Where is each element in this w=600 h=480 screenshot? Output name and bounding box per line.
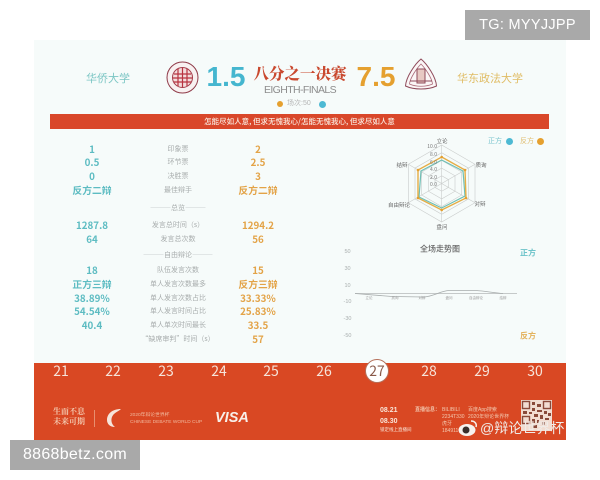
broadcast info: 2234T330 <box>442 414 465 420</box>
footer band <box>34 363 566 440</box>
stats table: vote and speech data: 40.4 <box>82 318 102 332</box>
radar chart: 10.0 <box>427 143 437 150</box>
banner: motto: 怎能尽如人意, 但求无愧我心/怎能无愧我心, 但求尽如人意 <box>204 116 395 127</box>
line chart: momentum: 质询 <box>392 295 399 300</box>
broadcast dates <box>380 407 412 432</box>
watermark: telegram id: TG: MYYJJPP <box>479 17 576 33</box>
label: negative side: 反方 <box>520 330 536 342</box>
stats table: vote and speech data: 18 <box>86 263 98 277</box>
stats table: vote and speech data: 反方二辩 <box>238 183 278 197</box>
stats table: vote and speech data: 1294.2 <box>242 218 274 232</box>
stats table: vote and speech data: 1287.8 <box>76 218 108 232</box>
stats table: vote and speech data: 队伍发言次数 <box>157 265 199 275</box>
stats table: vote and speech data: 57 <box>252 332 264 346</box>
footer logo: slogan: 未来可期 <box>53 416 85 427</box>
stats table: vote and speech data: 单人单次时间最长 <box>150 320 206 330</box>
radar chart: 质询 <box>475 161 487 169</box>
calendar dates <box>53 359 543 383</box>
calendar dates: 25 <box>263 361 279 381</box>
stats table: vote and speech data: 2.5 <box>251 155 265 169</box>
broadcast info: 2020年辩论世界杯 <box>468 414 509 420</box>
icon: orange dot <box>277 101 283 107</box>
stats table: vote and speech data: 反方三辩 <box>238 277 278 291</box>
broadcast info: 百度App搜索 <box>468 407 497 413</box>
left team score: 1.5 <box>207 61 245 92</box>
watermark: site <box>10 440 140 470</box>
right team score: 7.5 <box>357 61 395 92</box>
stats table: vote and speech data: 56 <box>252 232 264 246</box>
stats table: vote and speech data: 38.89% <box>74 290 110 304</box>
calendar dates: 22 <box>105 361 121 381</box>
radar chart: 盘问 <box>436 223 448 231</box>
cup text: 2020年辩论世界杯 <box>130 413 169 418</box>
cup text <box>130 412 202 425</box>
calendar dates: 30 <box>527 361 543 381</box>
stats table: vote and speech data: 印象票 <box>168 144 188 154</box>
stats table: vote and speech data: 33.33% <box>240 290 276 304</box>
stats table: vote and speech data: 15 <box>252 263 264 277</box>
stats table: vote and speech data: 单人发言次数最多 <box>150 279 206 289</box>
stats table: vote and speech data: ———自由辩论——— <box>143 250 213 260</box>
stats table: vote and speech data: 0 <box>89 169 95 183</box>
audience votes legend <box>277 99 326 108</box>
line chart: momentum: 30 <box>344 266 351 272</box>
line chart: momentum: 10 <box>344 283 351 289</box>
heading: left team name: 华侨大学 <box>86 73 130 85</box>
calendar dates: 24 <box>211 361 227 381</box>
legend: negative: 反方 <box>520 138 534 145</box>
calendar dates: 29 <box>474 361 490 381</box>
stats table: vote and speech data: 发言总次数 <box>160 234 196 244</box>
stats table: vote and speech data: “缺席审判”时间（s） <box>141 334 215 344</box>
radar chart: 结辩 <box>396 161 408 169</box>
highlighted date 27 <box>365 359 389 383</box>
QR code <box>521 400 552 431</box>
radar chart: 6.0 <box>430 159 437 166</box>
line chart: momentum: 盘问 <box>446 295 453 300</box>
broadcast dates: 08.21 <box>380 407 398 414</box>
stats table: vote and speech data: 0.5 <box>85 155 99 169</box>
stats table: vote and speech data: 单人发言次数占比 <box>150 292 206 302</box>
watermark: site: 8868betz.com <box>23 446 127 463</box>
stats table: vote and speech data: 3 <box>255 169 261 183</box>
legend: affirmative: 正方 <box>488 138 502 145</box>
line chart: momentum <box>344 249 517 339</box>
stats table: vote and speech data: 最佳辩手 <box>164 185 192 195</box>
stats table: vote and speech data: 决胜票 <box>168 171 188 181</box>
stats table: vote and speech data <box>72 142 278 346</box>
weibo handle: @辩论世界杯 <box>480 420 564 436</box>
radar chart: 对辩 <box>474 200 486 208</box>
footer logo: debate world cup <box>94 409 202 427</box>
radar chart: 4.0 <box>430 166 437 173</box>
icon: blue dot <box>319 101 326 108</box>
stats table: vote and speech data: 发言总时间（s） <box>152 220 204 230</box>
radar chart <box>388 137 487 231</box>
icon: orange dot <box>537 138 544 145</box>
calendar dates: 23 <box>158 361 174 381</box>
stats table: vote and speech data: 单人发言时间占比 <box>150 306 206 316</box>
stats table: vote and speech data: 正方三辩 <box>72 277 112 291</box>
stats table: vote and speech data: 2 <box>255 142 261 156</box>
calendar dates: 28 <box>421 361 437 381</box>
radar legend <box>488 137 544 145</box>
icon: cup swirl <box>107 409 121 427</box>
broadcast info: 直播信息： <box>415 407 440 413</box>
radar chart: 立论 <box>436 137 448 145</box>
icon: blue dot <box>506 138 513 145</box>
broadcast dates: 08.30 <box>380 418 398 425</box>
calendar dates: 26 <box>316 361 332 381</box>
banner: motto <box>50 114 549 129</box>
broadcast dates: 锁定线上直播间 <box>380 427 412 432</box>
stats table: vote and speech data: 64 <box>86 232 98 246</box>
line chart: momentum: -50 <box>344 333 351 339</box>
icon: right university seal <box>405 58 437 90</box>
broadcast info <box>415 406 509 434</box>
line chart: momentum: 对辩 <box>418 295 426 300</box>
watermark: telegram id <box>465 10 590 40</box>
stats table: vote and speech data: 反方二辩 <box>72 183 112 197</box>
logo: visa: VISA <box>215 410 249 426</box>
highlighted date 27: 27 <box>369 361 385 381</box>
footer logo: slogan: 生而不息 <box>53 406 85 417</box>
heading: right team name: 华东政法大学 <box>457 73 523 85</box>
footer logo: slogan <box>53 406 85 427</box>
radar chart: 自由辩论 <box>388 201 410 209</box>
radar chart: 2.0 <box>430 174 437 181</box>
icon: weibo eye <box>458 420 477 436</box>
subtitle: english round name: EIGHTH-FINALS <box>264 84 336 96</box>
stats table: vote and speech data: 33.5 <box>248 318 268 332</box>
cup text: CHINESE DEBATE WORLD CUP <box>130 420 202 425</box>
broadcast info: BILIBILI <box>442 407 460 413</box>
line chart title: 全场走势图 <box>420 244 460 254</box>
label: affirmative side: 正方 <box>520 248 536 258</box>
stats table: vote and speech data: 25.83% <box>240 304 276 318</box>
broadcast info: 184911 <box>442 428 458 434</box>
line chart: momentum: -30 <box>344 316 351 322</box>
radar chart: 8.0 <box>430 151 437 158</box>
line chart: momentum: -10 <box>344 299 351 305</box>
stats table: vote and speech data: 54.54% <box>74 304 110 318</box>
stats table: vote and speech data: ———总览——— <box>150 203 206 213</box>
broadcast info: 虎牙 <box>442 421 452 427</box>
line chart: momentum: 立论 <box>366 295 373 300</box>
watermark: weibo <box>458 420 564 436</box>
stats table: vote and speech data: 环节票 <box>168 157 188 167</box>
row: impression votes: 1 <box>89 142 95 156</box>
calendar dates: 21 <box>53 361 69 381</box>
line chart: momentum: 结辩 <box>500 295 507 300</box>
line chart: momentum: 50 <box>344 249 351 255</box>
line chart: momentum: 自由辩论 <box>469 295 483 300</box>
votes text: 场次:50 <box>287 100 311 107</box>
panel: match background <box>34 40 566 363</box>
icon: left university seal <box>166 62 198 94</box>
radar chart: 0.0 <box>430 181 437 188</box>
title: eighth-finals: 八分之一决赛 <box>253 62 347 84</box>
